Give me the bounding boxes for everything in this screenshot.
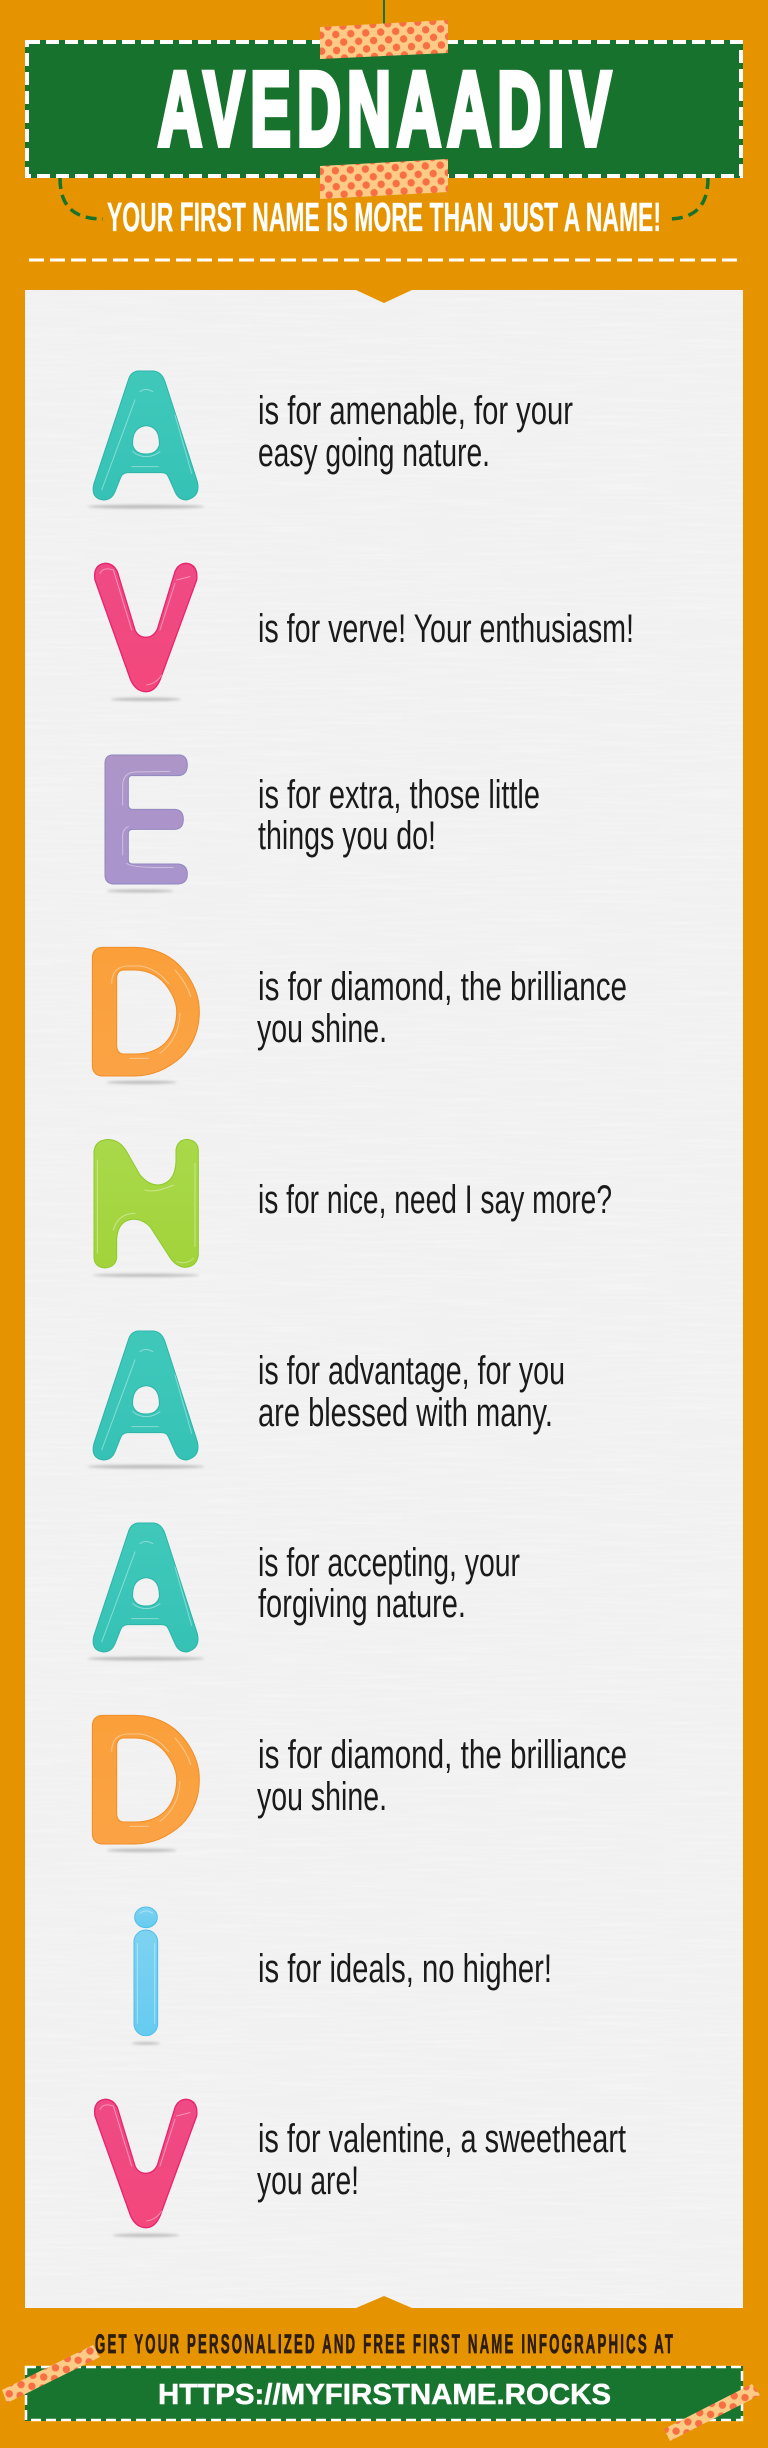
description text [257,2117,626,2203]
description text: things you do! [258,814,436,858]
footer url banner [25,2366,743,2421]
white dashed divider line [29,258,738,262]
description text: easy going nature. [258,431,490,475]
description text: is for diamond, the brilliance [258,1733,627,1777]
description text: is for valentine, a sweetheart [258,2117,626,2161]
icon: letter A [88,371,204,509]
row 4: letter D [92,947,627,1084]
row 6: letter A [88,1331,565,1469]
description text [258,773,540,858]
top tape [320,20,448,59]
description text: is for verve! Your enthusiasm! [258,607,634,651]
row 10: letter V [95,2099,626,2237]
url text: HTTPS://MYFIRSTNAME.ROCKS [158,2379,611,2411]
header banner [25,20,743,199]
description text: you are! [257,2159,359,2203]
green banner with dashed border [25,40,743,178]
row 2: letter V [95,563,634,701]
left dashed connector [60,178,103,219]
description text [258,1349,565,1435]
icon: letter V [95,563,197,701]
description text: you shine. [257,1007,387,1051]
description text [258,389,573,475]
row 9: letter I [132,1907,552,2045]
row 3: letter E [105,755,540,893]
description text: is for nice, need I say more? [258,1178,612,1222]
footer tape right [664,2384,760,2441]
description text: is for accepting, your [258,1541,520,1585]
title: AVEDNAADIV [158,51,611,168]
hanging string [383,0,385,25]
description text: is for ideals, no higher! [258,1947,552,1991]
description text: is for amenable, for your [258,389,573,433]
icon: letter N [93,1139,199,1277]
row 7: letter A [88,1523,520,1661]
icon: letter A [88,1523,204,1661]
description text: is for diamond, the brilliance [258,965,627,1009]
green banner with dashed border [25,2366,743,2421]
description text [257,965,627,1051]
right dashed connector [668,178,708,219]
description text: is for advantage, for you [258,1349,565,1393]
description text: are blessed with many. [258,1391,553,1435]
icon: letter D [92,1715,199,1852]
description text [257,1733,627,1819]
panel: name letters [25,290,743,2308]
icon: letter V [95,2099,197,2237]
icon: letter A [88,1331,204,1469]
icon: letter D [92,947,199,1084]
bottom tape [320,159,448,199]
row 8: letter D [92,1715,627,1852]
footer call to action text: GET YOUR PERSONALIZED AND FREE FIRST NAME INFOGRAPHICS AT [95,2330,673,2359]
description text [258,1541,520,1626]
description text: you shine. [257,1775,387,1819]
row 5: letter N [93,1139,612,1277]
footer tape left [2,2345,100,2403]
description text: is for extra, those little [258,773,540,817]
icon: letter E [105,755,187,893]
icon: letter i [132,1907,160,2045]
description text: forgiving nature. [258,1582,466,1626]
row 1: letter A [88,371,573,509]
